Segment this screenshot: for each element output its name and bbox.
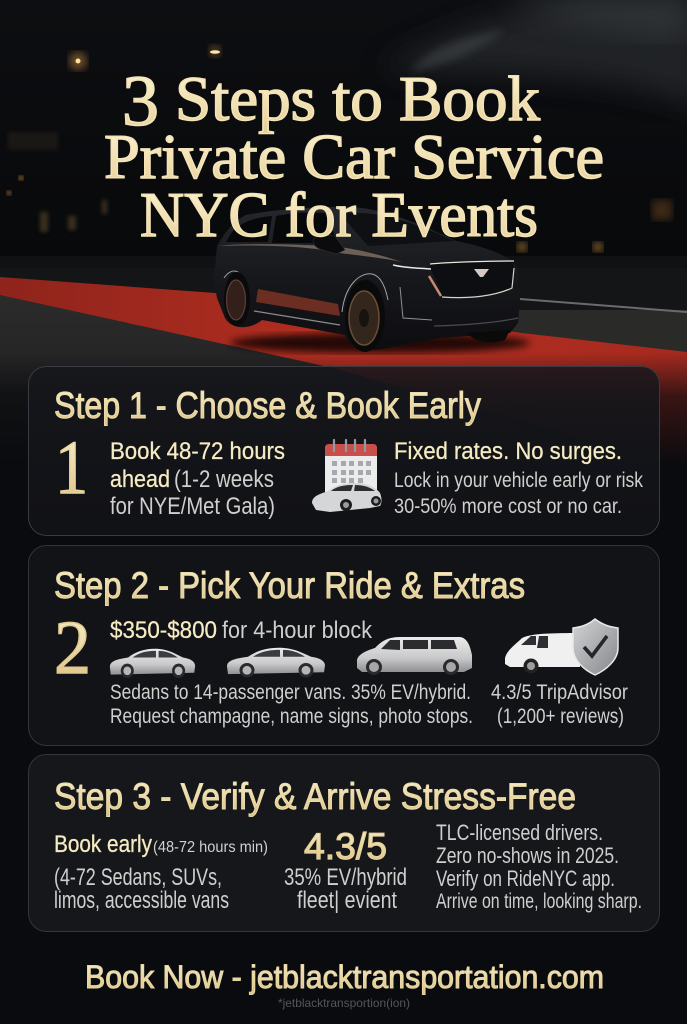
text: booking window: (1-2 weeks	[174, 466, 274, 493]
text: price: for 4-hour block	[222, 617, 373, 644]
text: booking window: ahead	[110, 466, 170, 493]
hero scene: night street with red carpet	[0, 0, 687, 477]
heading: step 3: Step 3 - Verify & Arrive Stress-Free	[54, 776, 576, 817]
text: booking window: Book 48-72 hours	[110, 438, 285, 465]
icon: white van with shield	[505, 619, 618, 675]
icon: long sedan	[227, 648, 325, 678]
text: driver verification	[436, 820, 642, 913]
title	[104, 61, 604, 250]
stat: rating: 35% EV/hybrid	[284, 864, 407, 891]
panel: step 3	[28, 754, 660, 932]
text: driver verification: Zero no-shows in 2025.	[436, 843, 619, 868]
text: driver verification: Verify on RideNYC app.	[436, 866, 615, 891]
title: NYC for Events	[140, 180, 538, 250]
hero SUV	[214, 207, 530, 353]
heading: step 1: Step 1 - Choose & Book Early	[54, 385, 481, 426]
text: tripadvisor rating: 4.3/5 TripAdvisor	[491, 680, 628, 704]
title: Private Car Service	[104, 122, 604, 192]
text: booking window: for NYE/Met Gala)	[110, 493, 275, 520]
text: book early: limos, accessible vans	[54, 887, 229, 914]
text: book early: (48-72 hours min)	[153, 839, 268, 856]
text: fixed rates: 30-50% more cost or no car.	[394, 494, 622, 518]
stat: rating: fleet| evient	[297, 887, 397, 914]
text: fleet and extras: Sedans to 14-passenger vans. 35% EV/hybrid.	[110, 680, 471, 704]
title: Steps to Book	[175, 64, 541, 134]
text: driver verification: TLC-licensed drivers.	[436, 820, 603, 845]
text: fleet and extras	[110, 680, 473, 728]
icon: calendar with car	[312, 440, 382, 512]
text: tripadvisor rating: (1,200+ reviews)	[497, 704, 624, 728]
icon: sedan	[110, 649, 195, 678]
panel: step 1	[28, 366, 660, 536]
heading: step 2: Step 2 - Pick Your Ride & Extras	[54, 565, 525, 606]
step number 1: 1	[55, 426, 88, 510]
text: fixed rates: Fixed rates. No surges.	[394, 438, 622, 465]
text: booking window	[110, 438, 285, 520]
icon: minivan	[357, 637, 472, 675]
text: book early: Book early	[54, 831, 152, 858]
text: price: $350-$800	[110, 617, 217, 644]
footnote: *jetblacktransportion(ion)	[278, 996, 410, 1010]
text: book early	[54, 831, 268, 914]
stat: rating: 4.3/5	[304, 826, 387, 867]
text: tripadvisor rating	[491, 680, 628, 728]
step number 2: 2	[54, 606, 91, 690]
text: price	[110, 617, 373, 644]
text: book early: (4-72 Sedans, SUVs,	[54, 864, 222, 891]
panel: step 2	[28, 546, 660, 746]
text: fleet and extras: Request champagne, name signs, photo stops.	[110, 704, 473, 728]
stat: rating	[284, 826, 407, 914]
text: fixed rates	[394, 438, 643, 518]
call to action: Book Now - jetblacktransportation.com	[85, 959, 604, 995]
title: 3	[122, 61, 159, 141]
